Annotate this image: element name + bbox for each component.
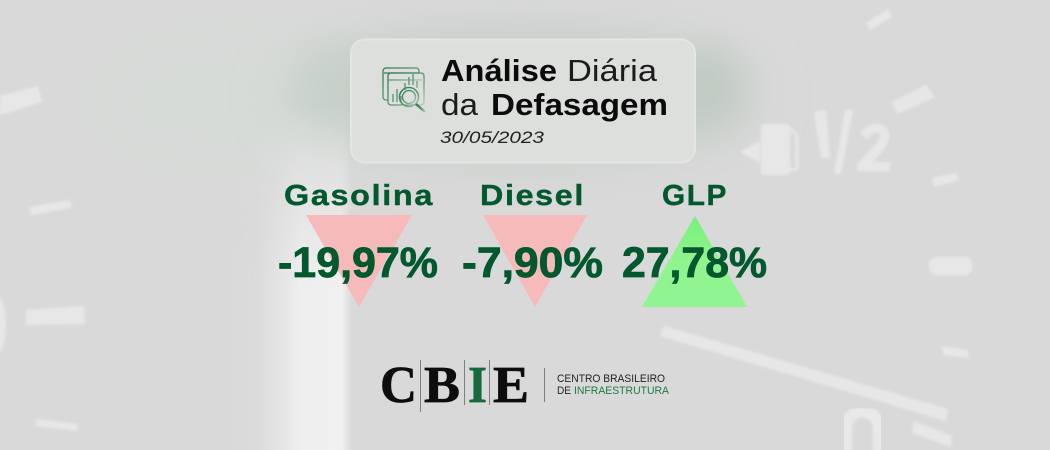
- logo letters: E: [493, 357, 529, 414]
- value: -19,97%: [278, 239, 438, 287]
- logo: CBIE: [380, 357, 670, 414]
- value: -7,90%: [462, 239, 603, 287]
- logo tagline second line: DE: [557, 385, 571, 397]
- heading: Diária: [567, 53, 658, 88]
- down triangle: [306, 215, 412, 307]
- up triangle: [642, 216, 747, 307]
- label: Diesel: [480, 180, 585, 212]
- title panel: [351, 40, 695, 162]
- logo letters: B: [424, 357, 460, 414]
- heading second line: Defasagem: [491, 87, 668, 122]
- logo letters: C: [380, 357, 417, 414]
- indicator: GLP: [622, 180, 767, 307]
- value: 27,78%: [622, 239, 767, 287]
- down triangle: [483, 215, 587, 307]
- logo tagline second line: INFRAESTRUTURA: [574, 385, 670, 397]
- heading second line: da: [441, 87, 479, 122]
- logo letters: I: [468, 357, 487, 414]
- heading: Análise: [441, 53, 557, 88]
- date: 30/05/2023: [440, 128, 545, 147]
- indicator: Diesel: [462, 180, 603, 307]
- label: GLP: [662, 180, 728, 212]
- icon: analysis windows with magnifier: [383, 68, 425, 112]
- indicator: Gasolina: [278, 180, 438, 307]
- label: Gasolina: [284, 180, 434, 212]
- logo tagline: CENTRO BRASILEIRO: [557, 373, 665, 385]
- logo letters: [380, 357, 529, 414]
